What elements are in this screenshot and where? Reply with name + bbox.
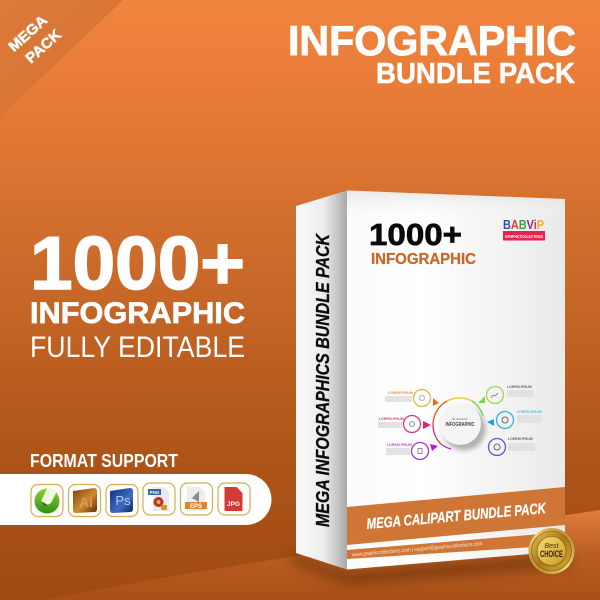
node labels: LOREM IPSUM: [508, 437, 533, 441]
box side panel: [296, 190, 347, 570]
icon: jpg file: [218, 483, 250, 515]
icon: png file: [143, 483, 175, 515]
box subheading: infographic: INFOGRAPHIC: [371, 251, 476, 268]
left nodes: [404, 390, 430, 460]
title: [288, 17, 576, 90]
box side panel: MEGA INFOGRAPHICS BUNDLE PACK: [312, 233, 333, 527]
node labels: LOREM IPSUM: [379, 417, 404, 421]
box front panel: [347, 190, 565, 570]
headline: 1000+ infographic fully editable: 1000+: [30, 221, 245, 305]
box footer strip: www.graphiccollections.com | support@graphiccollections.com: [351, 541, 483, 559]
corner ribbon: mega pack: PACK: [23, 27, 65, 67]
product box: [296, 190, 565, 570]
icon: photoshop: [106, 484, 138, 516]
icon: png file: PNG: [150, 490, 160, 495]
box band: MEGA CALIPART BUNDLE PACK: [366, 500, 548, 533]
logo: babvip: GRAPHICCOLLECTIONS: [505, 234, 543, 239]
headline: 1000+ infographic fully editable: [30, 221, 245, 364]
icon: jpg file: JPG: [227, 501, 240, 508]
box heading: 1000+: 1000+: [369, 217, 462, 252]
right nodes: [486, 386, 514, 456]
badge: best choice: [528, 528, 574, 574]
central disc: INFOGRAPHIC: [446, 422, 475, 428]
icon: eps file: EPS: [190, 504, 202, 510]
badge: best choice: Best: [544, 543, 560, 550]
headline: 1000+ infographic fully editable: INFOGRAPHIC: [30, 297, 245, 330]
panel: format support icons: [0, 474, 272, 525]
box footer strip: [347, 532, 565, 559]
title: INFOGRAPHIC: [288, 17, 576, 64]
corner ribbon: mega pack: MEGA: [6, 12, 51, 55]
node body lines: [378, 390, 541, 455]
arrows: [423, 396, 494, 451]
node labels: LOREM IPSUM: [388, 391, 413, 395]
logo: babvip: [503, 218, 545, 240]
icon: illustrator: Ai: [79, 494, 93, 510]
icon: illustrator: [68, 484, 100, 516]
headline: 1000+ infographic fully editable: FULLY EDITABLE: [30, 331, 245, 364]
logo: babvip: BABViP: [503, 218, 544, 232]
icon: eps file: [180, 483, 212, 515]
corner ribbon: mega pack: [0, 0, 123, 117]
central disc: [433, 398, 486, 450]
node labels: LOREM IPSUM: [507, 385, 532, 389]
node labels: [379, 385, 542, 447]
badge: best choice: CHOICE: [540, 549, 563, 560]
icon: coreldraw: [31, 484, 63, 516]
mini infographic on box: [378, 385, 542, 460]
title: BUNDLE PACK: [376, 58, 575, 90]
icon: photoshop: Ps: [115, 493, 131, 508]
box band: [347, 487, 565, 545]
node labels: LOREM IPSUM: [387, 443, 412, 447]
format support heading: FORMAT SUPPORT: [30, 451, 178, 471]
box shadow: [292, 553, 570, 584]
node labels: LOREM IPSUM: [517, 410, 542, 414]
central disc: BUSINESS: [452, 417, 468, 421]
